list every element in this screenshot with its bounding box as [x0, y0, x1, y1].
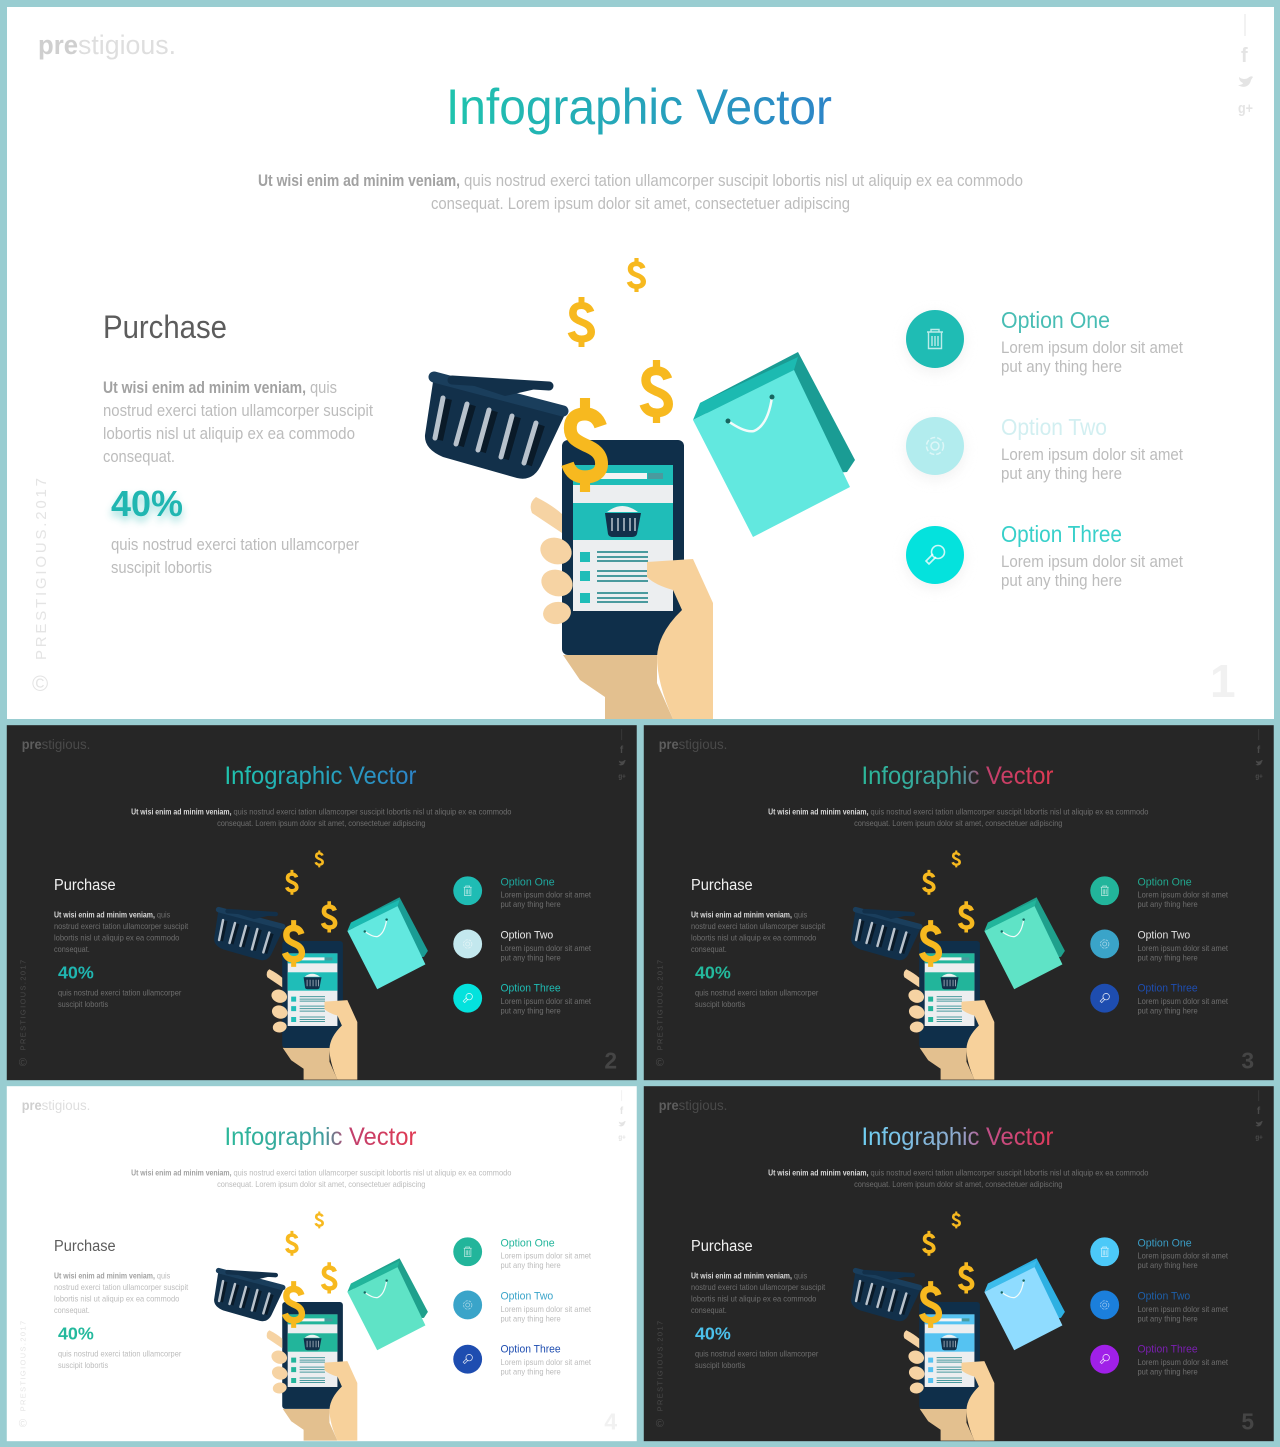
copyright mark: © [656, 1418, 664, 1430]
option 3 [1090, 983, 1229, 1016]
heading: Purchase: Purchase [54, 1238, 116, 1255]
logo: stigious. [679, 737, 727, 752]
hand thumb and wrist [647, 559, 713, 719]
subtitle text: consequat. Lorem ipsum dolor sit amet, consectetuer adipiscing [217, 818, 426, 828]
page number: 2 [604, 1048, 617, 1074]
option 2 [1090, 929, 1229, 962]
social icons [1255, 1090, 1263, 1141]
social icons [618, 1090, 626, 1141]
logo: stigious. [42, 737, 90, 752]
stat description [695, 989, 819, 1009]
paragraph: consequat. [691, 945, 727, 954]
option 1: Option One [1137, 1237, 1192, 1249]
paragraph [691, 1272, 826, 1315]
stat: 40%: 40% [58, 963, 94, 983]
option 3: put any thing here [1001, 572, 1122, 590]
option 2: put any thing here [1137, 1314, 1198, 1323]
stat description: quis nostrud exerci tation ullamcorper [695, 989, 819, 998]
option 2: Option Two [1137, 1290, 1190, 1302]
heading: Purchase: Purchase [691, 1238, 753, 1255]
option 1: put any thing here [1137, 900, 1198, 909]
option 3: Option Three [1137, 1344, 1198, 1356]
icon: shopping bag [693, 352, 855, 537]
option 2: put any thing here [1137, 953, 1198, 962]
subtitle text: quis nostrud exerci tation ullamcorper suscipit lobortis nisl ut aliquip ex ea commodo [464, 171, 1023, 190]
social icons: f [620, 745, 624, 756]
option 1: Lorem ipsum dolor sit amet [1137, 891, 1229, 900]
option 2: Option Two [500, 929, 553, 941]
logo: pre [38, 30, 78, 60]
vertical watermark: PRESTIGIOUS.2017 [19, 960, 28, 1050]
paragraph [691, 911, 826, 954]
paragraph [54, 1272, 189, 1315]
paragraph: consequat. [54, 945, 90, 954]
slide 5: dark blue and purple variant [644, 1086, 1274, 1441]
social icons: g+ [618, 1132, 626, 1141]
subtitle text: Ut wisi enim ad minim veniam, [131, 807, 232, 817]
page number: 1 [1210, 655, 1236, 707]
stat description: quis nostrud exerci tation ullamcorper [695, 1350, 819, 1359]
vertical watermark: PRESTIGIOUS.2017 [19, 1321, 28, 1411]
title: Infographic Vector [862, 762, 1053, 790]
option 2: Lorem ipsum dolor sit amet [1137, 944, 1229, 953]
option 2 [453, 929, 592, 962]
subtitle text: Ut wisi enim ad minim veniam, [768, 807, 869, 817]
paragraph: nostrud exerci tation ullamcorper suscipit [103, 402, 373, 420]
stat description: suscipit lobortis [58, 1000, 108, 1009]
paragraph: quis [157, 911, 170, 920]
option 2 [1090, 1290, 1229, 1323]
option 2: Lorem ipsum dolor sit amet [500, 1305, 592, 1314]
logo: pre [659, 1098, 679, 1113]
stat: 40%: 40% [695, 1324, 731, 1344]
option 1 [1090, 1237, 1229, 1270]
paragraph: lobortis nisl ut aliquip ex ea commodo [691, 933, 817, 942]
subtitle text: Ut wisi enim ad minim veniam, [258, 171, 460, 190]
option 1: Option One [500, 1237, 555, 1249]
option 1 [905, 307, 1183, 376]
social icons: f [1241, 45, 1248, 67]
paragraph: Ut wisi enim ad minim veniam, [103, 379, 306, 397]
stat description [111, 536, 359, 577]
stat description: quis nostrud exerci tation ullamcorper [58, 1350, 182, 1359]
option 2: Option Two [1001, 414, 1107, 440]
stat description: suscipit lobortis [58, 1361, 108, 1370]
page number: 3 [1241, 1048, 1254, 1074]
phone screen [573, 465, 673, 611]
option 3: put any thing here [1137, 1368, 1198, 1377]
paragraph: nostrud exerci tation ullamcorper suscipit [54, 922, 189, 931]
subtitle text [258, 171, 1023, 213]
option 2: Option Two [1137, 929, 1190, 941]
option 2: Lorem ipsum dolor sit amet [1001, 446, 1183, 464]
paragraph: consequat. [103, 448, 175, 466]
option 1: Lorem ipsum dolor sit amet [500, 891, 592, 900]
option 1: put any thing here [500, 1261, 561, 1270]
social icons [1238, 14, 1253, 117]
copyright mark: © [656, 1057, 664, 1069]
option 1: Lorem ipsum dolor sit amet [1137, 1252, 1229, 1261]
option 3: Option Three [1001, 521, 1122, 547]
option 3 [453, 1344, 592, 1377]
option 3: Lorem ipsum dolor sit amet [500, 997, 592, 1006]
stat: 40%: 40% [58, 1324, 94, 1344]
option 3 [905, 521, 1183, 590]
subtitle text: quis nostrud exerci tation ullamcorper suscipit lobortis nisl ut aliquip ex ea commodo [871, 1168, 1149, 1178]
illustration: phone, basket, bag, coins [851, 1211, 1065, 1441]
paragraph: lobortis nisl ut aliquip ex ea commodo [103, 425, 355, 443]
logo: pre [22, 1098, 42, 1113]
option 3 [1090, 1344, 1229, 1377]
subtitle text: consequat. Lorem ipsum dolor sit amet, consectetuer adipiscing [854, 818, 1063, 828]
subtitle text [131, 1168, 512, 1189]
option 3: Lorem ipsum dolor sit amet [1001, 553, 1183, 571]
subtitle text: Ut wisi enim ad minim veniam, [131, 1168, 232, 1178]
option 3: put any thing here [500, 1007, 561, 1016]
logo: stigious. [679, 1098, 727, 1113]
option 3 [453, 983, 592, 1016]
paragraph: quis [794, 911, 807, 920]
paragraph: consequat. [691, 1306, 727, 1315]
page number: 5 [1241, 1409, 1254, 1435]
fingers [531, 497, 576, 626]
title: Infographic Vector [225, 762, 416, 790]
paragraph [54, 911, 189, 954]
vertical watermark: PRESTIGIOUS.2017 [656, 960, 665, 1050]
option 1 [453, 876, 592, 909]
stat: 40%: 40% [695, 963, 731, 983]
option 1: Option One [500, 876, 555, 888]
option 2: put any thing here [1001, 465, 1122, 483]
subtitle text: consequat. Lorem ipsum dolor sit amet, consectetuer adipiscing [854, 1179, 1063, 1189]
slide 2: dark teal variant [7, 725, 637, 1080]
subtitle text [768, 1168, 1149, 1189]
subtitle text: Ut wisi enim ad minim veniam, [768, 1168, 869, 1178]
social icons [1255, 729, 1263, 780]
paragraph: nostrud exerci tation ullamcorper suscipit [54, 1283, 189, 1292]
paragraph [103, 379, 373, 466]
option 2: put any thing here [500, 1314, 561, 1323]
page number: 4 [604, 1409, 617, 1435]
subtitle text: quis nostrud exerci tation ullamcorper suscipit lobortis nisl ut aliquip ex ea commodo [234, 807, 512, 817]
option 1: put any thing here [1137, 1261, 1198, 1270]
paragraph: nostrud exerci tation ullamcorper suscipit [691, 1283, 826, 1292]
social icons: f [620, 1106, 624, 1117]
paragraph: Ut wisi enim ad minim veniam, [54, 911, 155, 920]
paragraph: lobortis nisl ut aliquip ex ea commodo [691, 1294, 817, 1303]
stat description: quis nostrud exerci tation ullamcorper [111, 536, 359, 554]
illustration: phone, basket, bag, coins [425, 258, 855, 719]
subtitle text [768, 807, 1149, 828]
logo: stigious. [42, 1098, 90, 1113]
logo: stigious. [78, 30, 176, 60]
illustration: phone, basket, bag, coins [851, 850, 1065, 1080]
subtitle text: consequat. Lorem ipsum dolor sit amet, consectetuer adipiscing [217, 1179, 426, 1189]
subtitle text: consequat. Lorem ipsum dolor sit amet, consectetuer adipiscing [431, 194, 850, 213]
paragraph: quis [157, 1272, 170, 1281]
option 3: Lorem ipsum dolor sit amet [1137, 997, 1229, 1006]
stat description: suscipit lobortis [111, 559, 212, 577]
copyright mark: © [19, 1057, 27, 1069]
large dollar sign [568, 398, 602, 492]
social icons: g+ [618, 771, 626, 780]
hand palm behind phone [563, 655, 673, 719]
vertical watermark: PRESTIGIOUS.2017 [656, 1321, 665, 1411]
option 1: Option One [1137, 876, 1192, 888]
title: Infographic Vector [862, 1123, 1053, 1151]
paragraph: Ut wisi enim ad minim veniam, [691, 1272, 792, 1281]
social icons: g+ [1255, 1132, 1263, 1141]
paragraph: quis [794, 1272, 807, 1281]
subtitle text: quis nostrud exerci tation ullamcorper suscipit lobortis nisl ut aliquip ex ea commodo [234, 1168, 512, 1178]
stat description [58, 989, 182, 1009]
social icons: g+ [1255, 771, 1263, 780]
subtitle text [131, 807, 512, 828]
option 2 [453, 1290, 592, 1323]
social icons: f [1257, 745, 1261, 756]
option 1: Lorem ipsum dolor sit amet [1001, 339, 1183, 357]
logo: pre [659, 737, 679, 752]
paragraph: lobortis nisl ut aliquip ex ea commodo [54, 933, 180, 942]
option 3: Option Three [500, 1344, 561, 1356]
phone [562, 440, 684, 655]
slide 4: light green and blue variant [7, 1086, 637, 1441]
stat: 40%: 40% [111, 483, 183, 524]
option 2: Lorem ipsum dolor sit amet [500, 944, 592, 953]
option 1: put any thing here [1001, 358, 1122, 376]
vertical watermark: PRESTIGIOUS.2017 [33, 478, 50, 660]
option 1 [453, 1237, 592, 1270]
option 1 [1090, 876, 1229, 909]
option 3: put any thing here [500, 1368, 561, 1377]
option 2 [905, 414, 1183, 483]
title: Infographic Vector [225, 1123, 416, 1151]
stat description: suscipit lobortis [695, 1000, 745, 1009]
paragraph: nostrud exerci tation ullamcorper suscipit [691, 922, 826, 931]
paragraph: consequat. [54, 1306, 90, 1315]
paragraph: Ut wisi enim ad minim veniam, [54, 1272, 155, 1281]
icon: dollar signs [571, 258, 668, 423]
paragraph: quis [310, 379, 337, 397]
option 1: Lorem ipsum dolor sit amet [500, 1252, 592, 1261]
slide 1: large light variant [7, 7, 1274, 719]
option 1: put any thing here [500, 900, 561, 909]
option 3: Option Three [500, 983, 561, 995]
paragraph: lobortis nisl ut aliquip ex ea commodo [54, 1294, 180, 1303]
copyright mark: © [19, 1418, 27, 1430]
option 2: Option Two [500, 1290, 553, 1302]
icon: shopping basket [425, 377, 567, 479]
illustration: phone, basket, bag, coins [214, 850, 428, 1080]
paragraph: Ut wisi enim ad minim veniam, [691, 911, 792, 920]
option 2: Lorem ipsum dolor sit amet [1137, 1305, 1229, 1314]
option 3: Option Three [1137, 983, 1198, 995]
stat description: suscipit lobortis [695, 1361, 745, 1370]
option 1: Option One [1001, 307, 1110, 333]
copyright mark: © [32, 671, 48, 696]
heading: Purchase: Purchase [103, 309, 227, 345]
stat description: quis nostrud exerci tation ullamcorper [58, 989, 182, 998]
logo: pre [22, 737, 42, 752]
stat description [695, 1350, 819, 1370]
social icons: f [1257, 1106, 1261, 1117]
subtitle text: quis nostrud exerci tation ullamcorper suscipit lobortis nisl ut aliquip ex ea commodo [871, 807, 1149, 817]
heading: Purchase: Purchase [691, 877, 753, 894]
social icons: g+ [1238, 100, 1253, 117]
option 2: put any thing here [500, 953, 561, 962]
option 3: put any thing here [1137, 1007, 1198, 1016]
illustration: phone, basket, bag, coins [214, 1211, 428, 1441]
slide 3: dark green and blue variant [644, 725, 1274, 1080]
option 3: Lorem ipsum dolor sit amet [500, 1358, 592, 1367]
social icons [618, 729, 626, 780]
title: Infographic Vector [446, 79, 832, 135]
stat description [58, 1350, 182, 1370]
option 3: Lorem ipsum dolor sit amet [1137, 1358, 1229, 1367]
heading: Purchase: Purchase [54, 877, 116, 894]
